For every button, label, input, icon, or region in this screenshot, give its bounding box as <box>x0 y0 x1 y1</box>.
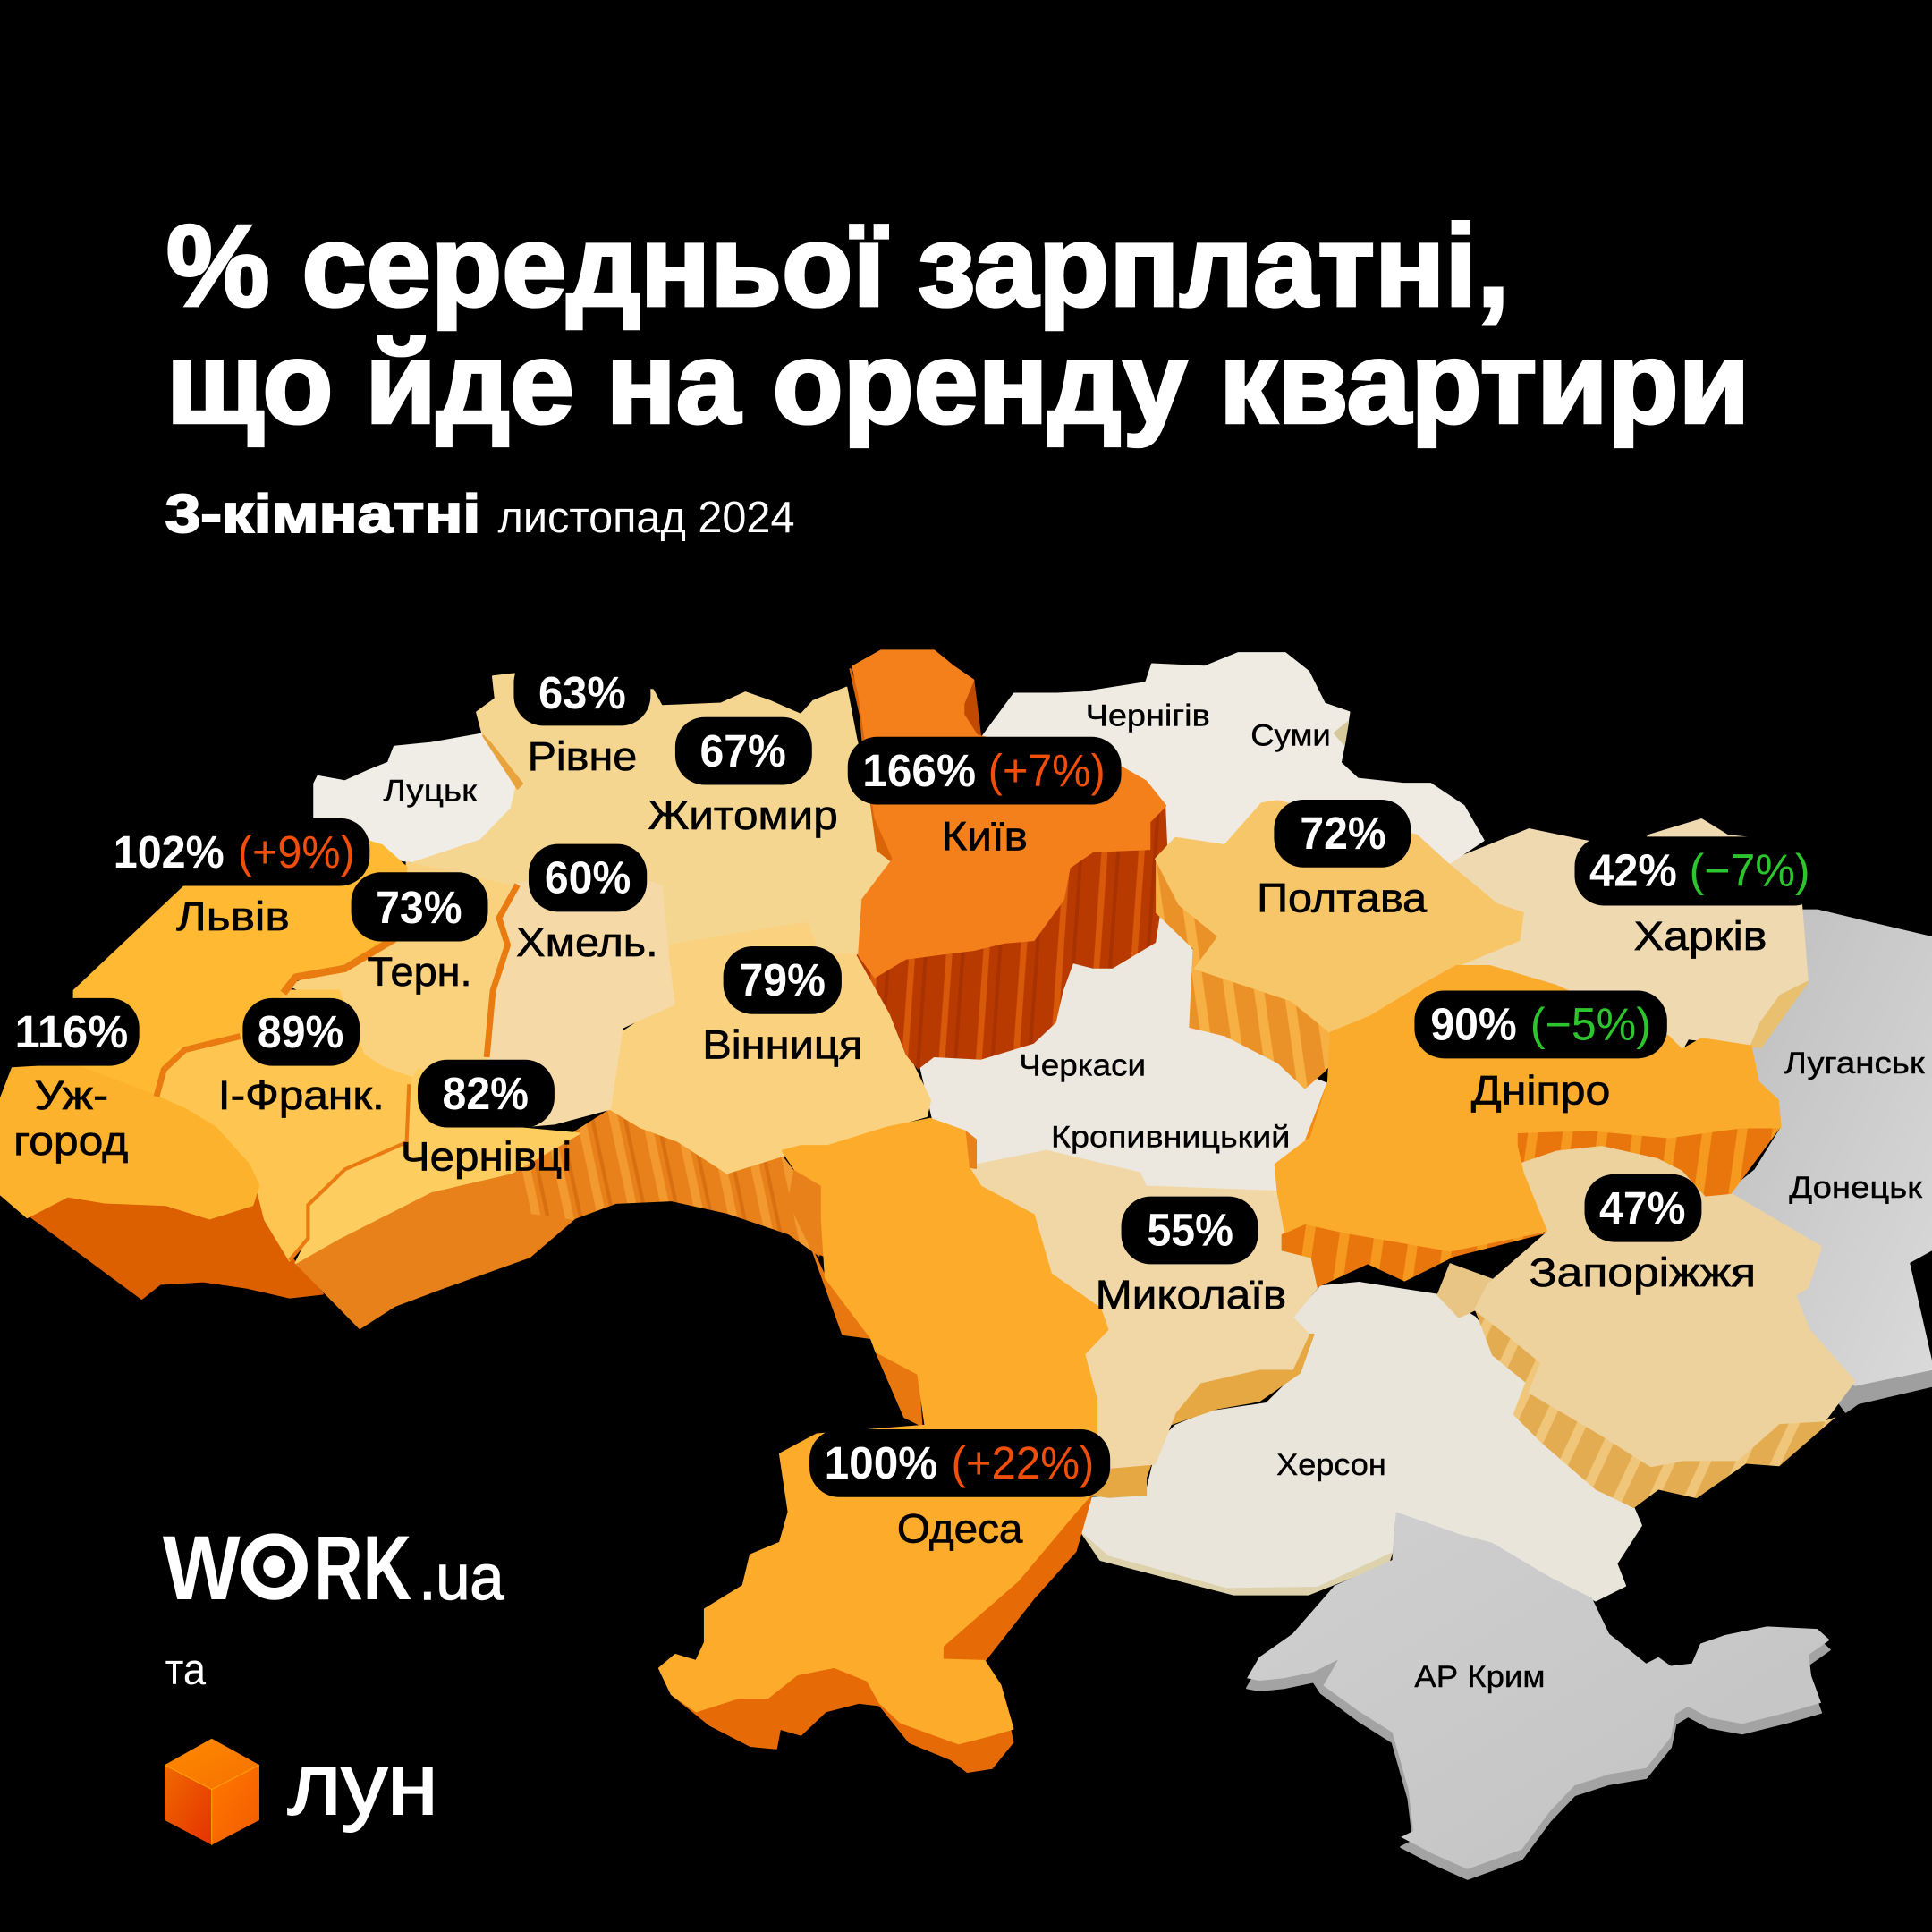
pill: Ivano-Frankivsk 89% <box>242 998 360 1066</box>
title: % середньої зарплатні, <box>166 202 1510 331</box>
pill: Kyiv 166% (+7%) <box>848 737 1122 805</box>
city labels: Запоріжжя <box>1530 1250 1756 1295</box>
pill: Ivano-Frankivsk 89%: 89% <box>258 1006 343 1057</box>
pill: Mykolaiv 55% <box>1122 1197 1258 1264</box>
pill: Zaporizhzhia 47% <box>1585 1174 1701 1242</box>
pill: Ternopil 73% <box>352 872 488 941</box>
pill: Vinnytsia 79%: 79% <box>740 954 826 1005</box>
small city labels: Чернігів <box>1086 699 1210 733</box>
pill: Vinnytsia 79% <box>724 946 842 1014</box>
pill: Zaporizhzhia 47%: 47% <box>1599 1182 1685 1233</box>
text: and: та <box>165 1644 206 1694</box>
pill: Mykolaiv 55%: 55% <box>1147 1205 1233 1256</box>
city labels: Терн. <box>368 949 472 995</box>
city labels <box>13 733 1767 1552</box>
city labels: Рівне <box>528 733 637 779</box>
pill: Odesa 100% (+22%): 100% <box>825 1437 937 1488</box>
small city labels: Суми <box>1250 718 1331 752</box>
logo: WORK.ua: W <box>163 1517 241 1619</box>
city labels: Уж- <box>35 1072 108 1118</box>
region: Crimea <box>1247 1512 1830 1879</box>
region: Ivano-Frankivsk <box>154 991 412 1260</box>
small city labels: Донецьк <box>1789 1171 1923 1205</box>
region: Lviv <box>74 819 407 1096</box>
small city labels <box>383 699 1926 1694</box>
region: Vinnytsia <box>610 923 930 1173</box>
region: Zaporizhzhia <box>1438 1146 1854 1508</box>
region: Kharkiv <box>1446 819 1808 1050</box>
small city labels: Черкаси <box>1019 1049 1146 1083</box>
pill: Odesa 100% (+22%): (+22%) <box>951 1437 1094 1488</box>
pill: Chernivtsi 82% <box>418 1060 555 1127</box>
region: Chernivtsi <box>296 1068 579 1263</box>
subtitle <box>165 483 795 544</box>
pill: Kharkiv 42% (−7%): 42% <box>1589 844 1677 895</box>
region: Kyiv <box>851 650 1168 1070</box>
small city labels: Луганськ <box>1784 1046 1926 1080</box>
logo: WORK.ua <box>163 1517 504 1619</box>
city labels: Львів <box>176 894 290 939</box>
city labels: Харків <box>1634 913 1767 959</box>
logo: WORK.ua: RK <box>314 1517 411 1619</box>
pill: Lviv 102% (+9%): (+9%) <box>238 826 355 877</box>
city labels: Одеса <box>897 1506 1023 1552</box>
city labels: Полтава <box>1257 875 1428 920</box>
logo: LUN cube <box>165 1739 259 1845</box>
logo: LUN wordmark: лун <box>288 1737 438 1833</box>
pill: Zhytomyr 67% <box>675 717 812 785</box>
small city labels: Кропивницький <box>1051 1121 1290 1155</box>
pill: Uzhhorod 116% <box>0 998 140 1066</box>
city labels: город <box>13 1118 128 1164</box>
region: Ternopil <box>290 862 512 1115</box>
region: Khmelnytskyi <box>487 881 674 1127</box>
subtitle: 3-кімнатні <box>165 483 480 544</box>
region: Lutsk <box>314 733 523 862</box>
region: Luhansk and Donetsk <box>1721 910 1932 1412</box>
city labels: Київ <box>941 814 1028 860</box>
pill: Kyiv 166% (+7%): (+7%) <box>988 745 1106 796</box>
city labels: Дніпро <box>1471 1067 1610 1113</box>
pill: Zhytomyr 67%: 67% <box>699 725 786 776</box>
pill: Dnipro 90% (−5%) <box>1414 991 1667 1058</box>
region: Cherkasy and Kropyvnytskyi <box>920 913 1343 1201</box>
city labels: Вінниця <box>702 1021 862 1067</box>
pill: Khmelnytskyi 60% <box>529 844 647 911</box>
region: Mykolaiv <box>967 1151 1318 1497</box>
region: Kherson <box>1080 1283 1641 1600</box>
city labels: І-Франк. <box>218 1072 385 1118</box>
small city labels: Херсон <box>1276 1448 1386 1482</box>
pill: Poltava 72%: 72% <box>1300 808 1386 859</box>
small city labels: Луцьк <box>383 774 478 808</box>
pill: Odesa 100% (+22%) <box>809 1429 1110 1497</box>
pill: Chernivtsi 82%: 82% <box>443 1068 529 1119</box>
city labels: Житомир <box>648 792 838 838</box>
pill: Kharkiv 42% (−7%) <box>1575 836 1824 905</box>
title <box>166 202 1750 447</box>
region: Rivne and Zhytomyr <box>407 674 894 986</box>
city labels: Чернівці <box>401 1134 572 1180</box>
pill: Dnipro 90% (−5%): 90% <box>1430 999 1517 1050</box>
borders between western regions <box>157 885 518 1260</box>
pill: Uzhhorod 116%: 116% <box>15 1006 128 1057</box>
pill: Lviv 102% (+9%): 102% <box>114 826 225 877</box>
side: Uzhhorod and Ivano-Frankivsk south <box>0 1109 828 1328</box>
pill: Rivne 63% <box>513 653 650 725</box>
region: Uzhhorod <box>0 1064 258 1218</box>
pill: Khmelnytskyi 60%: 60% <box>545 852 631 903</box>
region: Dnipro <box>1275 966 1781 1288</box>
small city labels: АР Крим <box>1414 1660 1545 1694</box>
region: Odesa <box>659 1119 1107 1772</box>
pill: Rivne 63%: 63% <box>538 667 626 718</box>
logo: WORK.ua: .ua <box>419 1542 504 1614</box>
pill: Lviv 102% (+9%) <box>98 818 369 886</box>
region: Chernihiv and Sumy <box>983 653 1484 875</box>
title: що йде на оренду квартири <box>166 319 1750 448</box>
map of Ukraine <box>0 650 1932 1879</box>
pill: Ternopil 73%: 73% <box>376 882 462 933</box>
subtitle: листопад 2024 <box>498 492 795 542</box>
pill: Kharkiv 42% (−7%): (−7%) <box>1690 844 1810 895</box>
city labels: Хмель. <box>516 919 658 965</box>
city labels: Миколаїв <box>1096 1272 1286 1318</box>
pill: Kyiv 166% (+7%): 166% <box>862 745 976 796</box>
pill: Dnipro 90% (−5%): (−5%) <box>1530 999 1651 1050</box>
pill: Poltava 72% <box>1274 800 1411 868</box>
region: Poltava <box>1156 801 1523 1089</box>
